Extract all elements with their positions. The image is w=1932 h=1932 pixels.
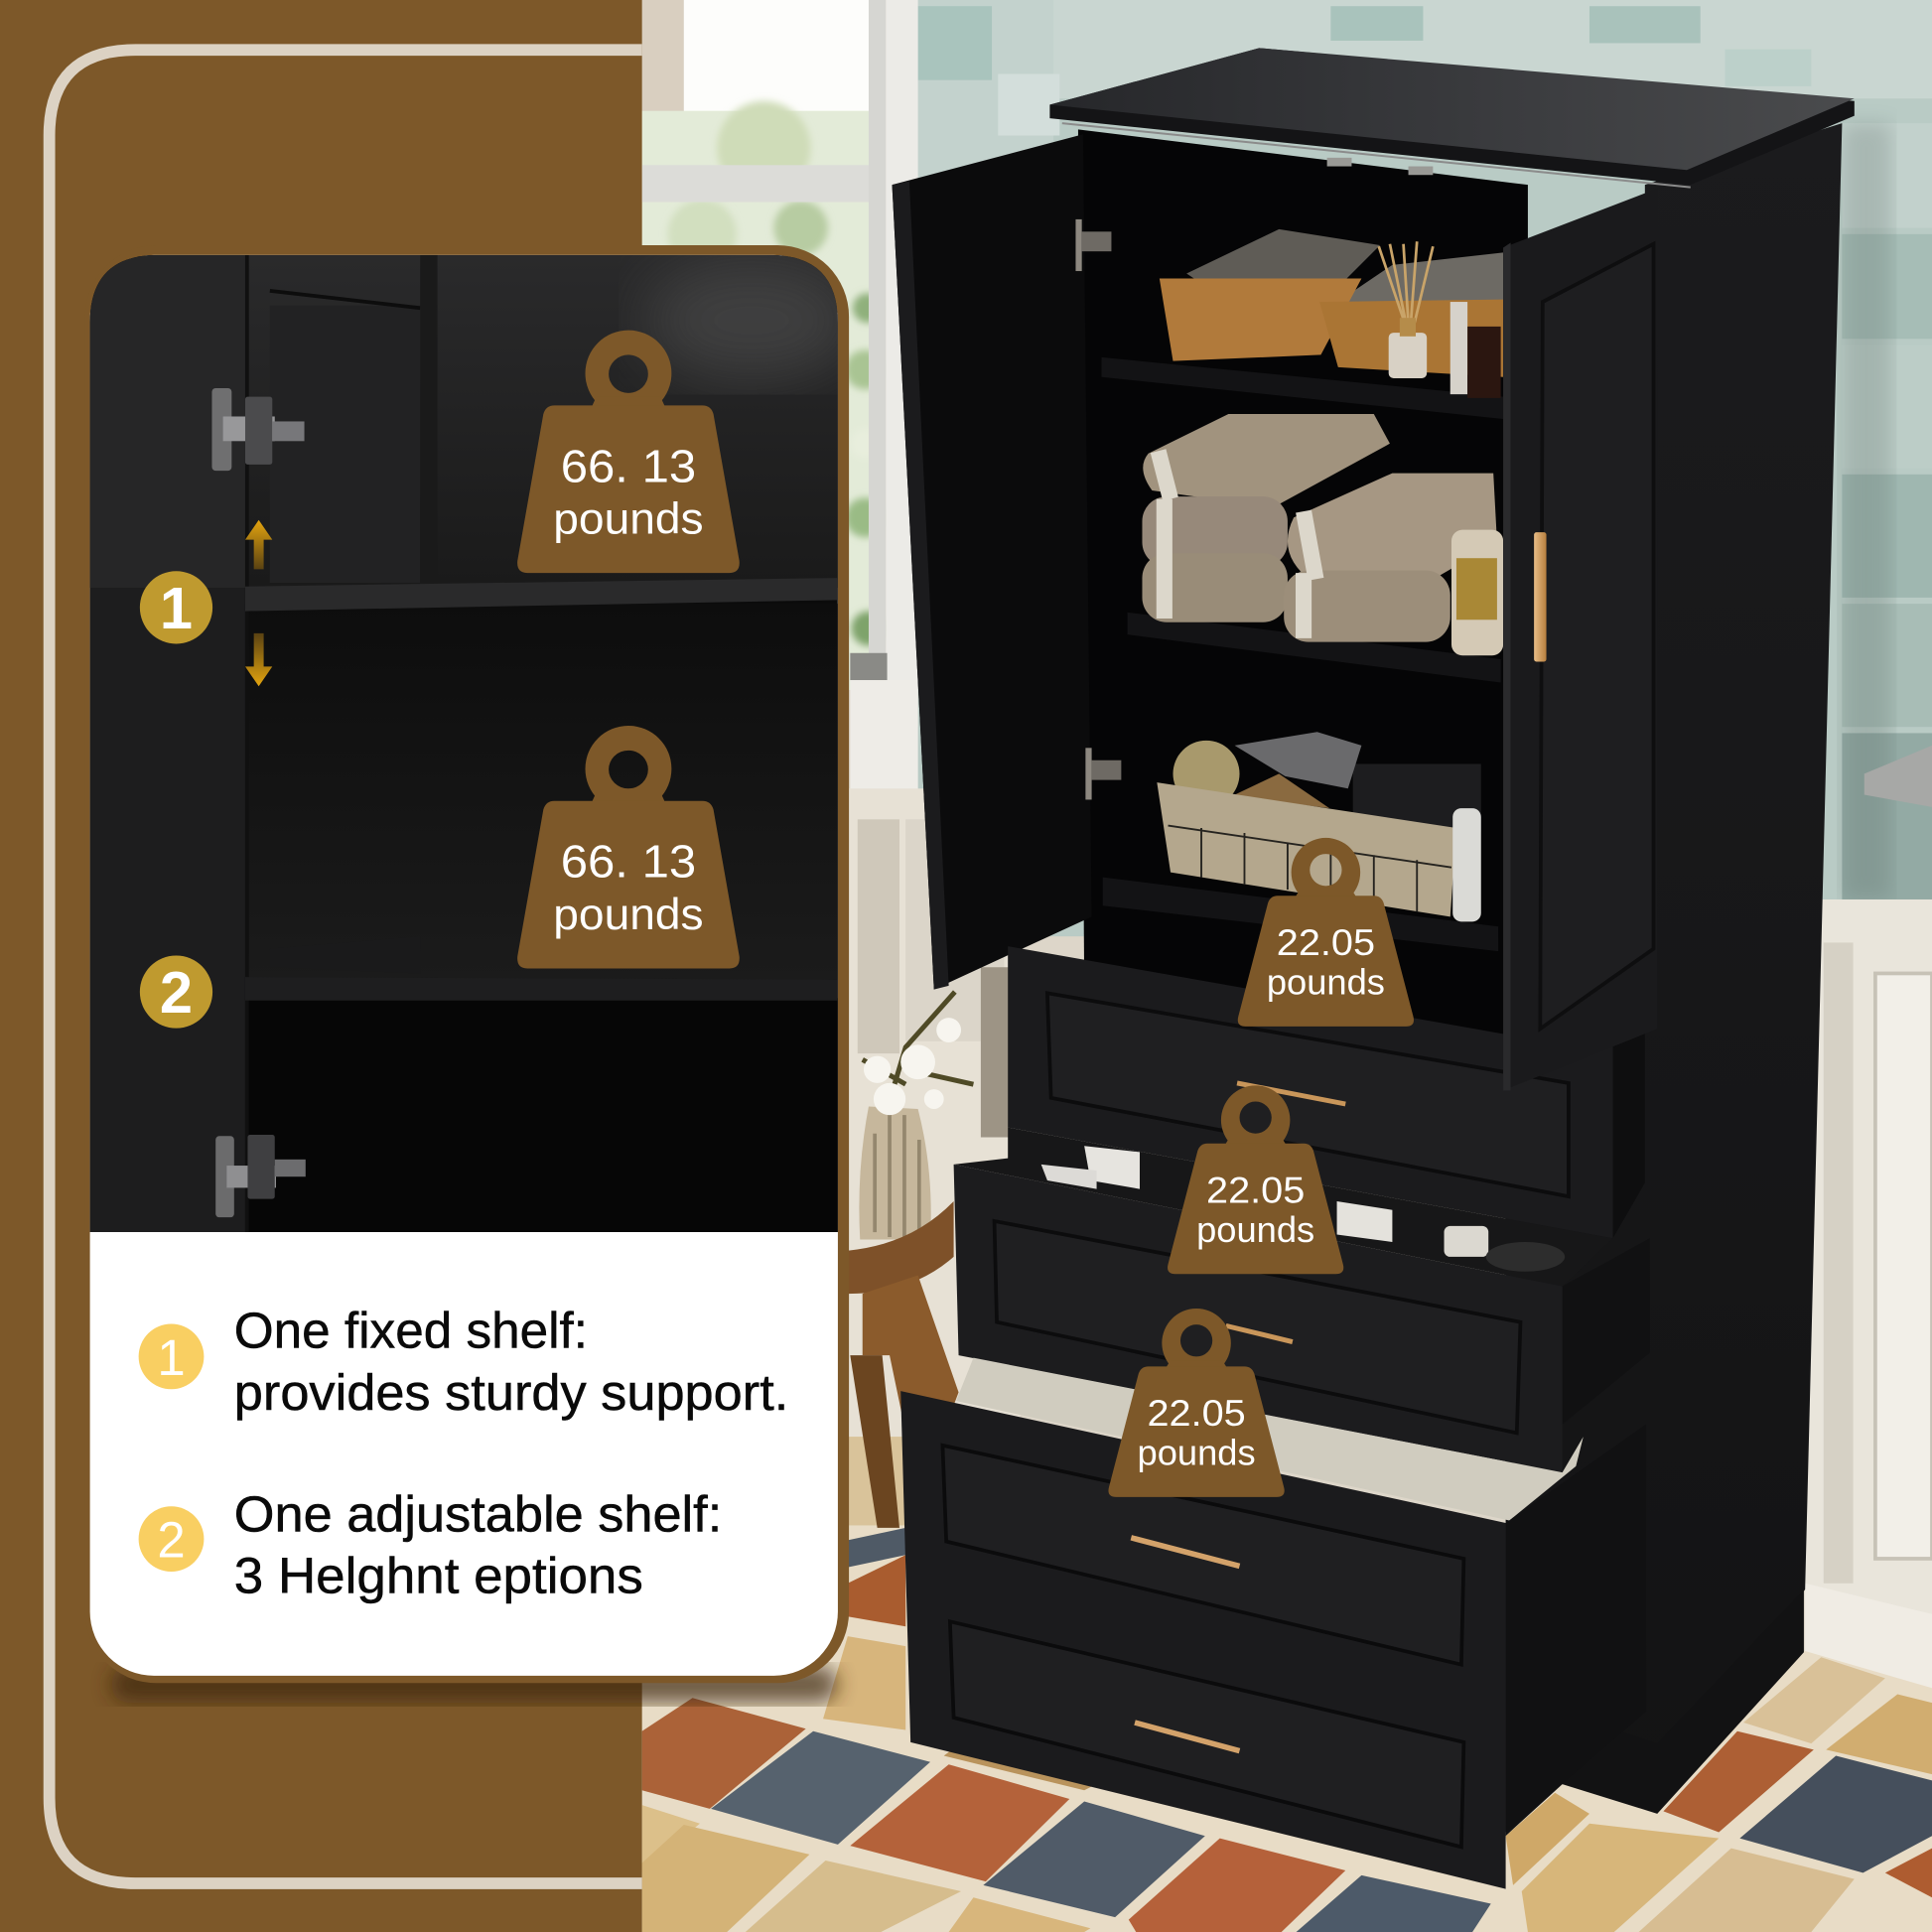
badge 2 on photo [140, 955, 212, 1029]
panel border [85, 245, 849, 1683]
weight tag cabinet shelf: pounds [1267, 962, 1385, 1003]
door handle [1534, 532, 1547, 661]
badge 1 on photo [140, 571, 212, 643]
interior shelves [1102, 357, 1503, 951]
shelf two [245, 977, 838, 1001]
shelf description 2: 3 Helghnt eptions [234, 1548, 643, 1604]
number icon 2: 2 [157, 1512, 186, 1569]
shelf description 2 [139, 1486, 722, 1604]
window with garden view [642, 0, 918, 791]
upper hinge [211, 388, 305, 471]
cabinet side panel [1506, 123, 1842, 1836]
weight tag lower shelf [517, 726, 740, 968]
wooden stool [848, 1201, 959, 1528]
cream frame outline [50, 50, 642, 1883]
badge 1 on photo: 1 [160, 575, 193, 641]
weight tag middle drawer [1168, 1085, 1343, 1274]
number icon 2 [139, 1506, 204, 1572]
weight tag lower shelf: 66. 13 [561, 836, 696, 888]
middle drawer contents [954, 1128, 1613, 1287]
top shelf baskets and towels [1160, 229, 1503, 398]
shelf one [245, 578, 838, 612]
shelf description 1: One fixed shelf: [234, 1303, 588, 1359]
weight tag cabinet shelf [1238, 838, 1414, 1027]
badge 2 on photo: 2 [160, 959, 193, 1026]
arrow down [245, 633, 272, 686]
middle drawer [954, 1165, 1650, 1472]
number icon 1 [139, 1324, 204, 1389]
door hinges [1075, 158, 1433, 799]
main panel [85, 245, 863, 1683]
weight tag bottom drawer [1108, 1309, 1285, 1497]
weight tag middle drawer: pounds [1196, 1209, 1314, 1250]
weight tag middle drawer: 22.05 [1206, 1169, 1305, 1210]
weight tag lower shelf: pounds [553, 891, 704, 939]
lotion bottle [1451, 530, 1503, 655]
shelf description 1: provides sturdy support. [234, 1364, 788, 1421]
background scene [642, 0, 1932, 1932]
wall tiles [918, 0, 1932, 936]
weight tag upper shelf: 66. 13 [561, 440, 696, 491]
cabinet close-up photo [90, 255, 863, 1232]
floor tiles [642, 1437, 1932, 1932]
wall shelf [1864, 746, 1932, 807]
left wainscot panel [849, 788, 1021, 1437]
white panel body [90, 255, 838, 1676]
right wainscot panel [1805, 899, 1932, 1691]
shelf description 2: One adjustable shelf: [234, 1486, 722, 1543]
cabinet [893, 48, 1855, 1889]
weight tag upper shelf [517, 331, 740, 573]
shelf description 1 [139, 1303, 788, 1421]
number icon 1: 1 [157, 1329, 186, 1386]
weight tag bottom drawer: pounds [1138, 1433, 1256, 1473]
open left door [893, 134, 1433, 990]
weight tag bottom drawer: 22.05 [1147, 1392, 1246, 1434]
lower basket with toiletries [1157, 732, 1481, 921]
open right door [1503, 189, 1657, 1090]
plinth base [1563, 1589, 1804, 1814]
cabinet interior [1078, 129, 1528, 1084]
weight tag cabinet shelf: 22.05 [1277, 921, 1375, 963]
room backdrop [642, 0, 1932, 1932]
brown side panel [0, 0, 642, 1932]
top drawer [1008, 946, 1645, 1238]
shadow under main panel [111, 1666, 838, 1703]
lower hinge [215, 1135, 306, 1217]
weight tag upper shelf: pounds [553, 494, 704, 543]
bottom drawer towels [956, 1358, 1584, 1520]
stacked towels [1142, 414, 1497, 642]
vase with flowers [859, 992, 973, 1240]
cabinet top slab [1049, 48, 1855, 188]
arrow up [245, 520, 272, 569]
bottom drawer [900, 1391, 1646, 1889]
